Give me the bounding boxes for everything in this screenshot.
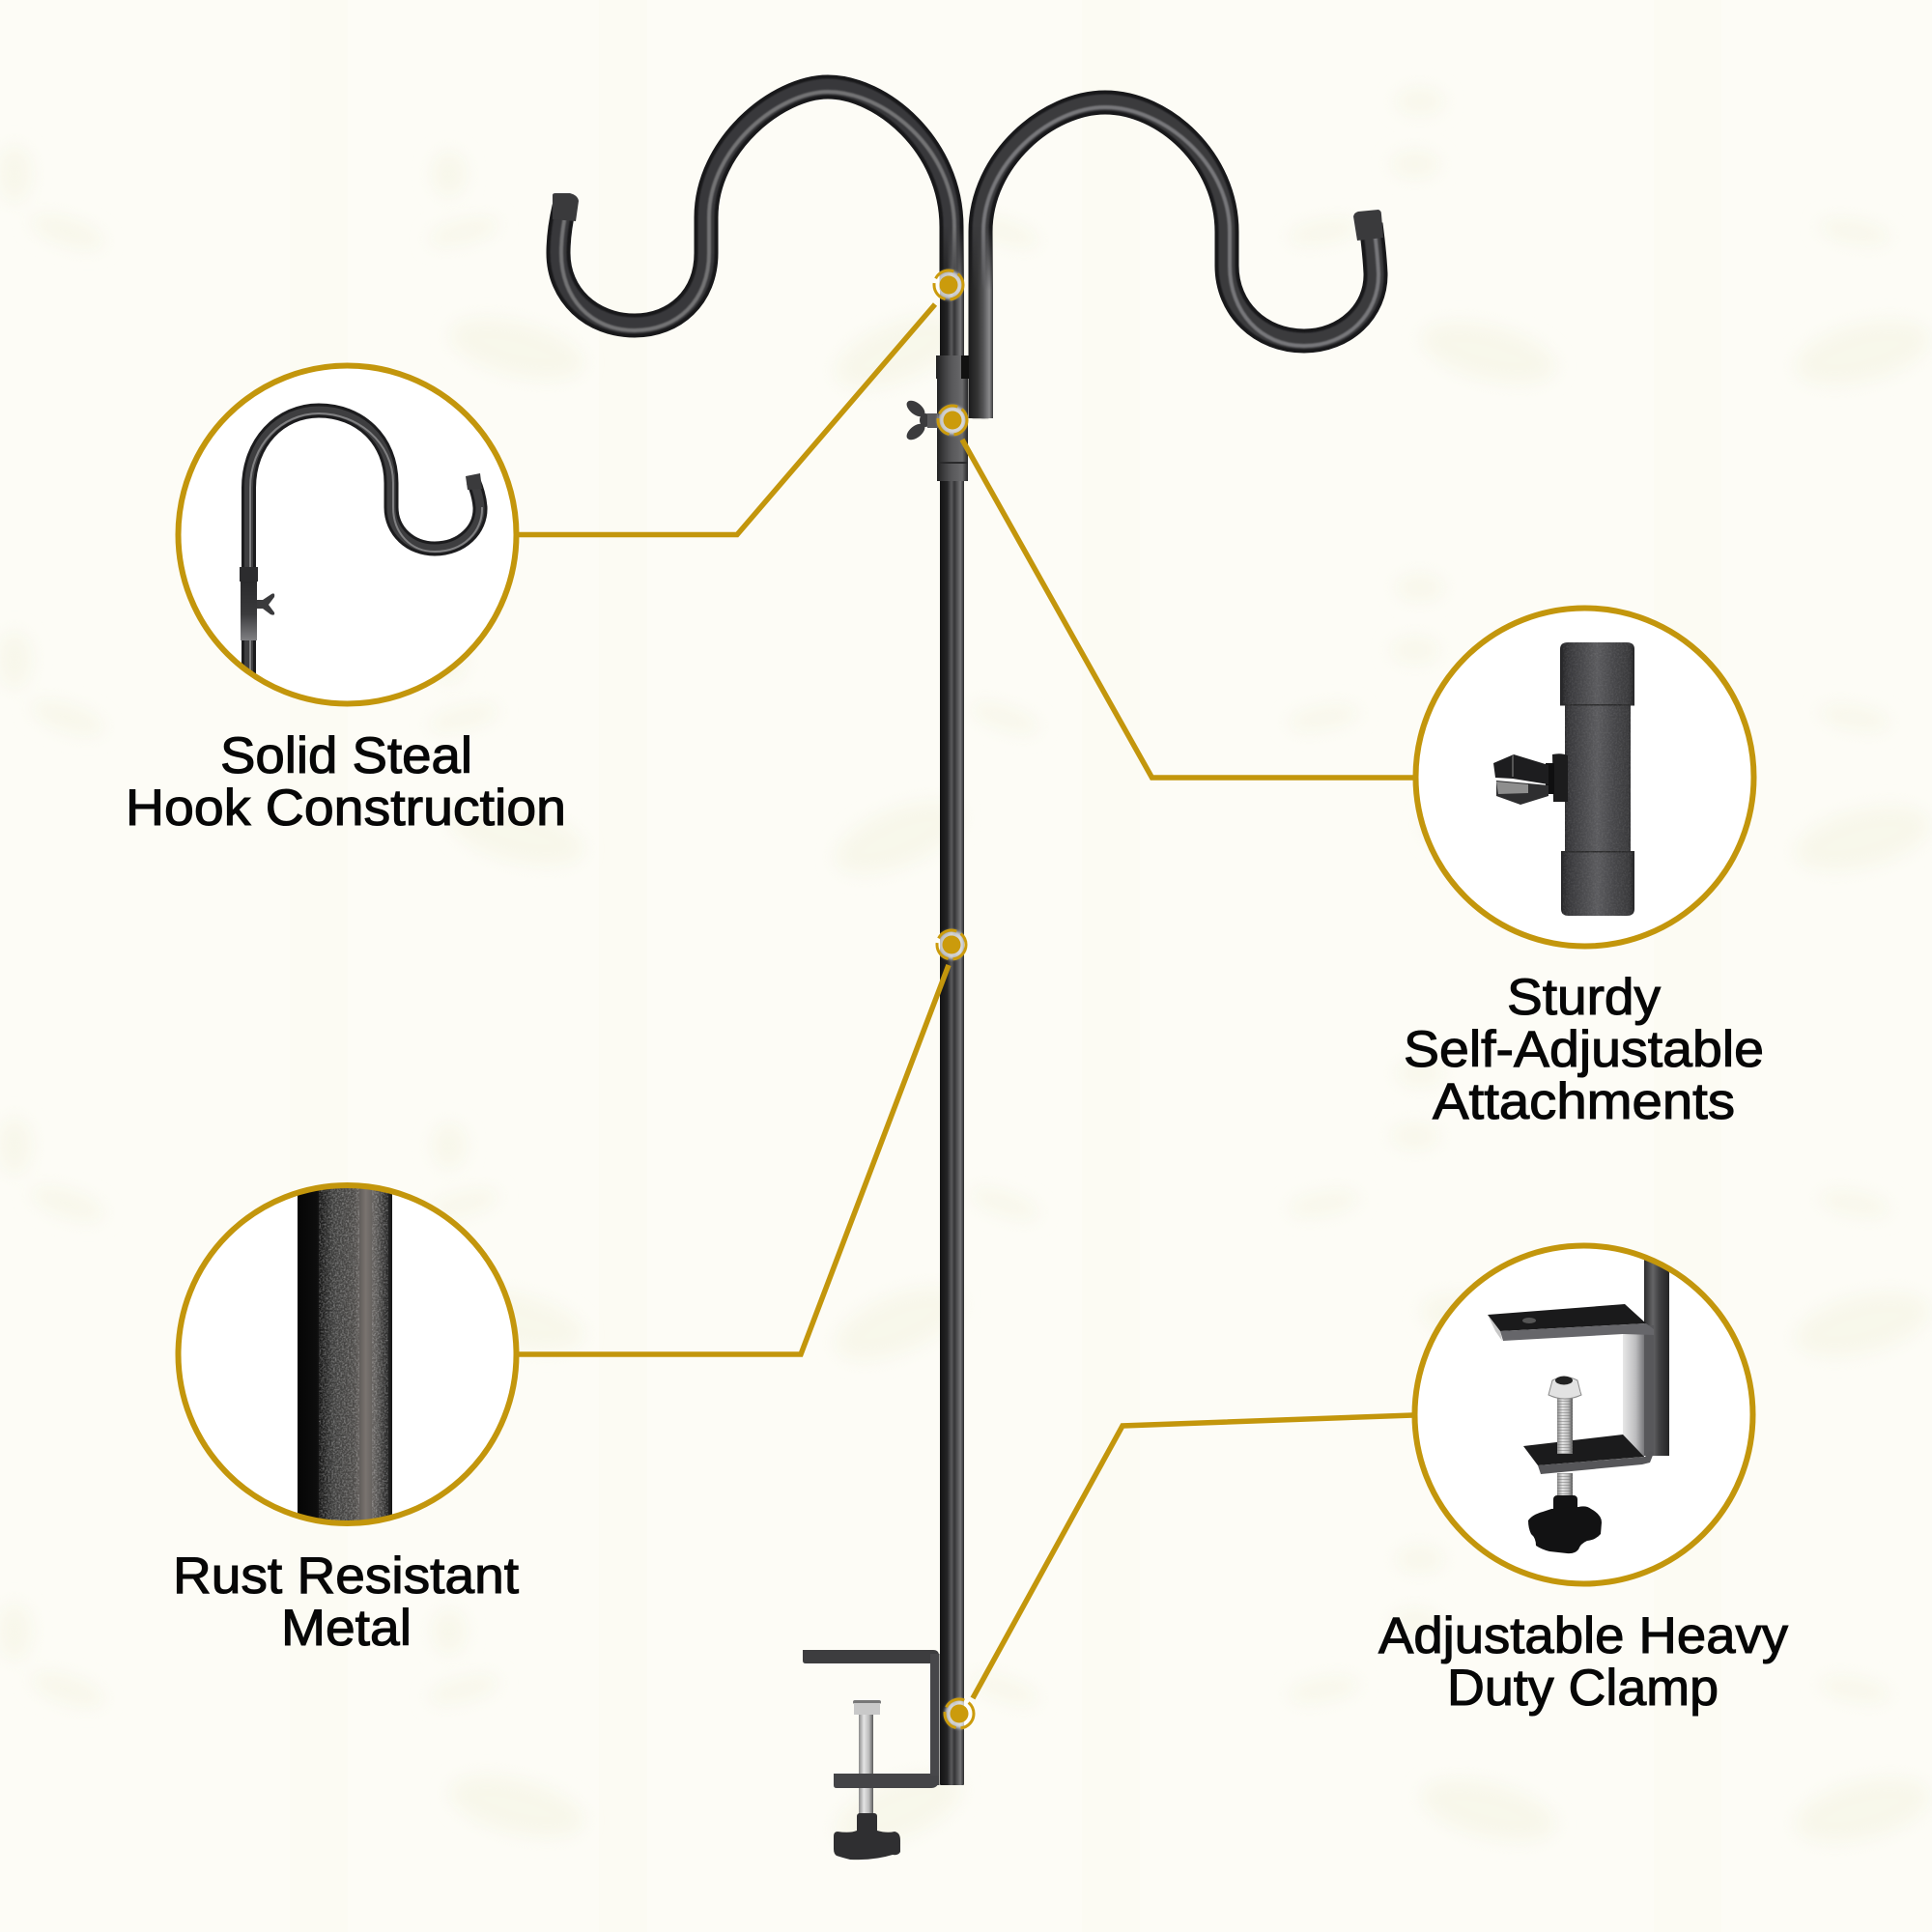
label: sturdy self-adjustable attachments: Attachments — [1433, 1073, 1735, 1130]
inset: textured tube — [298, 1182, 392, 1526]
main pole — [940, 227, 964, 1785]
panel: adjustable heavy duty clamp — [1414, 1241, 1752, 1584]
label: adjustable heavy duty clamp: Duty Clamp — [1447, 1660, 1719, 1717]
label: solid steal hook construction: Hook Construction — [126, 780, 566, 837]
label: sturdy self-adjustable attachments — [1404, 969, 1764, 1130]
leader line: attachment — [962, 440, 1413, 778]
clamp back — [930, 1654, 939, 1785]
label: sturdy self-adjustable attachments: Self-Adjustable — [1404, 1021, 1764, 1078]
label: solid steal hook construction: Solid Steal — [220, 727, 472, 784]
callout dot: hook — [934, 270, 963, 299]
label: adjustable heavy duty clamp — [1378, 1607, 1789, 1717]
inset: black knob — [1528, 1495, 1602, 1553]
clamp bolt — [853, 1700, 881, 1815]
inset: end cap — [466, 473, 482, 490]
callout dot: metal — [937, 930, 966, 959]
leader line: hook — [519, 304, 935, 535]
callout dot: clamp — [945, 1699, 974, 1728]
wing nut — [904, 397, 938, 443]
inset: sleeve tube — [1560, 642, 1634, 916]
inset: wing nut — [257, 593, 274, 615]
panel: rust resistant metal — [178, 1182, 516, 1526]
label: rust resistant metal — [173, 1548, 519, 1657]
left hook end cap — [553, 193, 579, 221]
clamp knob — [834, 1813, 900, 1860]
right hook — [969, 102, 1383, 418]
panel: self-adjustable attachment — [1416, 609, 1754, 947]
label: solid steal hook construction — [126, 727, 566, 837]
table clamp — [803, 1650, 939, 1860]
right hook end cap — [1353, 210, 1383, 241]
left hook — [553, 87, 954, 330]
leader line: clamp — [973, 1415, 1413, 1698]
inset: clamp — [1488, 1241, 1669, 1553]
inset: wing screw — [1493, 753, 1568, 805]
callout dot: attachment — [938, 406, 967, 435]
right hook straight stem — [969, 227, 993, 418]
clamp bottom arm — [834, 1774, 939, 1788]
label: rust resistant metal: Metal — [281, 1600, 412, 1657]
clamp top arm — [803, 1650, 939, 1663]
label: rust resistant metal: Rust Resistant — [173, 1548, 519, 1605]
product: double shepherd hook with clamp — [553, 87, 1383, 1860]
inset: single hook — [240, 411, 482, 696]
label: adjustable heavy duty clamp: Adjustable Heavy — [1378, 1607, 1789, 1664]
panel: solid steel hook — [178, 365, 516, 703]
leader line: metal — [519, 965, 949, 1354]
adjustable collar on pole — [936, 355, 969, 481]
background: faint vertical stripes — [290, 0, 1721, 1932]
label: sturdy self-adjustable attachments: Sturdy — [1507, 969, 1662, 1026]
